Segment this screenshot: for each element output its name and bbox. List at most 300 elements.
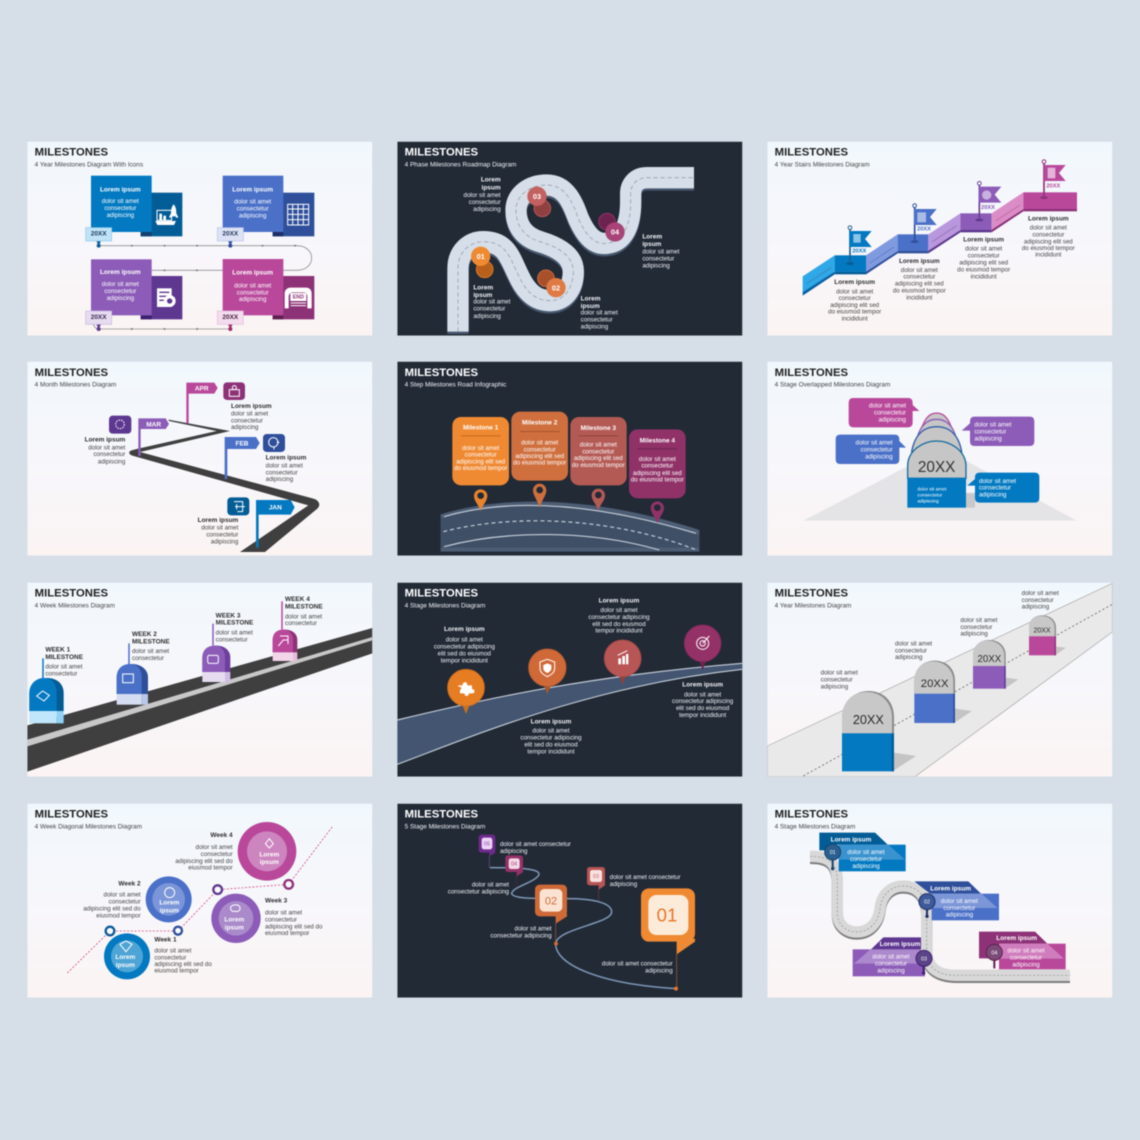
text MAR: dolor sit amet (88, 444, 126, 451)
banner 02 (914, 881, 999, 920)
text stage 1: consectetur adipiscing (434, 643, 495, 650)
text: phase 2: dolor sit amet (581, 310, 618, 317)
text stone 4: dolor sit amet (1022, 590, 1059, 597)
card 1 (86, 176, 182, 248)
stone 1 (842, 691, 916, 771)
panel: 4 stage overlapped (767, 362, 1112, 556)
text week 4: dolor sit amet (285, 613, 322, 620)
text APR: adipiscing (231, 424, 259, 431)
card 2: 20XX (222, 231, 239, 238)
title: MILESTONES (775, 588, 849, 600)
text stage 3: dolor sit amet (600, 607, 638, 614)
front block: dolor sit amet (917, 486, 947, 492)
title: MILESTONES (35, 367, 109, 379)
flag 1: 20XX (852, 248, 866, 254)
circle week 3: ipsum (225, 924, 244, 931)
flag FEB (225, 437, 260, 479)
text JAN: adipiscing (211, 539, 239, 546)
marker week 1 (29, 658, 64, 723)
card 3: consectetur (104, 288, 136, 295)
banner 01: Lorem ipsum (831, 836, 872, 843)
text: phase 1 (473, 284, 511, 320)
text: stage 1: do eiusmod tempor (828, 309, 881, 316)
flag JAN: JAN (269, 504, 282, 511)
callout purple: consectetur (974, 428, 1006, 435)
marker 02: 02 (552, 283, 560, 292)
text week 3 (216, 612, 254, 643)
marker week 2 (117, 643, 148, 705)
title: MILESTONES (775, 147, 849, 159)
icon JAN (227, 497, 249, 515)
text week 2: dolor sit amet (104, 892, 141, 899)
banner 03: adipiscing (877, 967, 905, 974)
banner 02: Lorem ipsum (930, 886, 971, 893)
marker week 4 (273, 601, 297, 661)
panel: 4 week diagonal (27, 804, 372, 998)
tag 03 (587, 867, 605, 901)
subtitle: 4 Week Diagonal Milestones Diagram (35, 823, 142, 830)
text week 2: adipiscing elit sed do (83, 906, 141, 913)
text stage 1: elit sed do eiusmod (438, 650, 492, 657)
text MAR: consectetur (93, 451, 125, 458)
text: stage 3: adipiscing elit sed (959, 259, 1009, 266)
card 2: adipiscing (239, 213, 267, 220)
title: MILESTONES (35, 809, 109, 821)
text: phase 1: ipsum (473, 292, 493, 299)
card 2: Lorem ipsum (232, 187, 273, 194)
text: stage 3: dolor sit amet (965, 246, 1003, 253)
text MAR: Lorem ipsum (85, 436, 126, 443)
text week 2: Week 2 (118, 881, 141, 888)
text APR: Lorem ipsum (231, 403, 272, 410)
panel: 4 stage road banners (767, 804, 1112, 998)
text week 1: MILESTONE (45, 654, 84, 661)
text JAN (198, 517, 239, 546)
text stone 3: dolor sit amet (960, 617, 998, 624)
marker 03 (527, 187, 551, 217)
card 3 (86, 259, 182, 331)
banner 03: dolor sit amet (872, 954, 910, 961)
text stone 1: consectetur (821, 676, 853, 683)
circle week 4: ipsum (260, 859, 279, 866)
banner 01: adipiscing (852, 863, 880, 870)
timeline path (93, 246, 312, 329)
card: milestone 2: adipiscing elit sed (515, 453, 565, 460)
subtitle: 4 Year Milestones Diagram (775, 602, 851, 609)
text week 2: consectetur (109, 899, 141, 906)
tag 02: 02 (545, 896, 557, 908)
text week 3: dolor sit amet (216, 630, 253, 637)
card: milestone 1: dolor sit amet (462, 445, 500, 452)
card 2: dolor sit amet (234, 199, 272, 206)
tag 03: 03 (593, 874, 599, 880)
text week 4: dolor sit amet (196, 844, 233, 851)
text week 4: consectetur (285, 620, 317, 627)
circle week 3: Lorem (224, 917, 244, 924)
card 4: dolor sit amet (234, 282, 272, 289)
front block: adipiscing (917, 499, 939, 505)
pin 01: 01 (830, 850, 836, 856)
banner 03: Lorem ipsum (880, 941, 921, 948)
callout sky blue: dolor sit amet (979, 478, 1016, 485)
text week 4: eiusmod tempor (188, 865, 233, 872)
circle week 4: Lorem (259, 851, 279, 858)
card 4: 20XX (222, 314, 239, 321)
title: MILESTONES (405, 367, 479, 379)
pin 4 (651, 501, 664, 523)
text stage 2: tempor incididunt (527, 748, 575, 755)
text JAN: consectetur (206, 531, 238, 538)
text FEB: dolor sit amet (266, 462, 303, 469)
flag FEB: FEB (236, 440, 249, 447)
text stage 4: elit sed do eiusmod (676, 705, 730, 712)
card: milestone 4: dolor sit amet (639, 456, 676, 463)
text: stage 2: do eiusmod tempor (893, 287, 946, 294)
card 2 (217, 176, 314, 248)
callout blue (836, 435, 906, 464)
text: phase 4 (642, 233, 680, 269)
icon APR (223, 382, 245, 400)
circle week 1: ipsum (116, 962, 135, 969)
text: phase 2: adipiscing (581, 324, 609, 331)
text week 2 (132, 631, 170, 662)
card 4: consectetur (237, 289, 269, 296)
text week 3 (265, 897, 323, 937)
text week 4: MILESTONE (285, 604, 323, 611)
zigzag road (129, 420, 319, 552)
flag 1 (846, 226, 872, 265)
text week 2: consectetur (132, 655, 164, 662)
subtitle: 4 Stage Milestones Diagram (775, 823, 855, 830)
banner 01 (819, 833, 906, 871)
card: milestone 1: adipiscing elit sed (456, 459, 506, 466)
card 1: consectetur (104, 205, 136, 212)
callout purple (962, 417, 1034, 446)
text stone 3: adipiscing (960, 631, 988, 638)
card 3: adipiscing (107, 295, 135, 302)
flag MAR (138, 418, 169, 456)
tag 01: 01 (657, 904, 677, 925)
title: MILESTONES (775, 367, 849, 379)
callout pink: consectetur (874, 409, 906, 416)
stairs (803, 192, 1077, 296)
subtitle: 4 Year Milestones Diagram With Icons (35, 161, 143, 168)
text week 3: WEEK 3 (216, 612, 241, 619)
front block (907, 478, 966, 508)
marker 03: 03 (533, 192, 541, 201)
pin 04 (986, 944, 1002, 968)
text week 3: consectetur (216, 636, 248, 643)
panel: 4 year milestone stones (767, 583, 1112, 777)
text: phase 2: consectetur (581, 317, 613, 324)
text: stage 2: consectetur (903, 274, 935, 281)
diagonal road (27, 628, 372, 772)
card: milestone 4: Milestone 4 (640, 438, 675, 445)
text APR (231, 403, 272, 431)
winding road (458, 178, 694, 334)
card 4: Lorem ipsum (232, 269, 273, 276)
callout blue: dolor sit amet (856, 439, 893, 446)
subtitle: 4 Stage Overlapped Milestones Diagram (775, 382, 890, 389)
card 4: adipiscing (239, 296, 267, 303)
text week 1: adipiscing elit sed do (154, 961, 212, 968)
flag 3 (975, 181, 1001, 221)
text stage 3 (588, 597, 650, 635)
text: stage 2: Lorem ipsum (899, 258, 940, 265)
text: stage 4: do eiusmod tempor (1022, 245, 1075, 252)
card 1: Lorem ipsum (100, 187, 141, 194)
card: milestone 2: Milestone 2 (522, 419, 558, 426)
banner 02: consectetur (943, 905, 975, 912)
text: phase 1: Lorem (473, 284, 493, 291)
perspective road (767, 583, 1112, 777)
card: milestone 1: consectetur (465, 451, 497, 458)
text week 2: MILESTONE (132, 639, 170, 646)
text: stage 4: consectetur (1032, 231, 1064, 238)
card: milestone 3: Milestone 3 (581, 425, 616, 432)
text: stage 1: adipiscing elit sed (830, 302, 880, 309)
text stone 4: adipiscing (1022, 604, 1050, 611)
year label: 20XX (918, 459, 955, 476)
text week 1: Week 1 (154, 936, 177, 943)
pin 1 (474, 489, 487, 511)
card: milestone 4: adipiscing elit sed (633, 470, 682, 477)
banner 04 (979, 932, 1066, 969)
text week 1: WEEK 1 (45, 646, 71, 653)
text 01: dolor sit amet consectetur (602, 961, 673, 968)
road band (397, 663, 742, 764)
text stage 3: elit sed do eiusmod (592, 621, 646, 628)
pin 2 (533, 484, 546, 508)
text week 3: adipiscing elit sed do (265, 923, 323, 930)
card: milestone 4: do eiusmod tempor (631, 477, 684, 484)
callout purple: dolor sit amet (974, 421, 1012, 428)
text: phase 3: adipiscing (473, 206, 501, 213)
card: milestone 4: consectetur (641, 463, 673, 470)
text MAR (85, 436, 126, 465)
text: phase 4: Lorem (642, 233, 662, 240)
stone 4: 20XX (1033, 628, 1051, 635)
flag 4: 20XX (1046, 184, 1060, 190)
text week 1: eiusmod tempor (154, 968, 199, 975)
tag 04 (505, 855, 523, 889)
banner 04: Lorem ipsum (996, 935, 1037, 942)
text stone 1: dolor sit amet (821, 669, 858, 676)
text: stage 1: dolor sit amet (836, 288, 874, 295)
circle week 1 (104, 933, 150, 979)
card: milestone 3: do eiusmod tempor (572, 462, 625, 469)
text week 2 (83, 881, 141, 919)
card: milestone 3: adipiscing elit sed (574, 455, 623, 462)
text: phase 3 (464, 177, 501, 213)
flag 4 (1040, 160, 1066, 199)
text stage 3: tempor incididunt (595, 628, 643, 635)
subtitle: 4 Step Milestones Road Infographic (405, 382, 507, 389)
text: stage 3: Lorem ipsum (963, 237, 1004, 244)
text: stage 3: incididunt (971, 273, 997, 280)
title: MILESTONES (35, 147, 109, 159)
panel: 4 week road (27, 583, 372, 777)
text week 1 (154, 936, 212, 975)
stone 4 (1029, 615, 1066, 655)
text APR: consectetur (231, 417, 263, 424)
text week 4: Week 4 (210, 832, 233, 839)
card 1: 20XX (91, 231, 107, 238)
subtitle: 4 Stage Milestones Diagram (405, 603, 485, 610)
marker 01: 01 (477, 252, 485, 261)
text stage 1: tempor incididunt (441, 657, 488, 664)
text stage 2: consectetur adipiscing (520, 735, 582, 742)
text: phase 2: ipsum (581, 303, 600, 310)
tag 04: 04 (511, 862, 517, 868)
title: MILESTONES (405, 809, 479, 821)
text: phase 1: dolor sit amet (473, 299, 511, 306)
text stone 2: adipiscing (895, 654, 923, 661)
text stage 1: dolor sit amet (446, 636, 483, 643)
text: stage 3: do eiusmod tempor (957, 266, 1010, 273)
text JAN: Lorem ipsum (198, 517, 239, 524)
text: phase 3: ipsum (482, 184, 501, 191)
subtitle: 4 Month Milestones Diagram (35, 382, 116, 389)
text: stage 2: dolor sit amet (901, 267, 938, 274)
card 1: adipiscing (107, 212, 135, 219)
text stage 3: consectetur adipiscing (588, 614, 650, 621)
text stage 4: Lorem ipsum (682, 681, 723, 688)
text: phase 3: dolor sit amet (464, 192, 501, 199)
card: milestone 2: consectetur (524, 446, 556, 453)
banner 02: dolor sit amet (941, 898, 978, 905)
banner 03: consectetur (875, 960, 907, 967)
text week 1 (45, 646, 84, 677)
title: MILESTONES (405, 588, 479, 600)
subtitle: 4 Week Milestones Diagram (35, 603, 115, 610)
circle week 2 (146, 876, 192, 922)
flag MAR: MAR (146, 421, 161, 428)
tag 01 (641, 888, 695, 991)
pin 02 (919, 894, 935, 918)
text APR: dolor sit amet (231, 410, 268, 417)
text: stage 1 (828, 279, 881, 322)
title: MILESTONES (405, 147, 479, 159)
text week 1: dolor sit amet (45, 663, 83, 670)
tag 05: 05 (484, 842, 490, 848)
title: MILESTONES (35, 588, 109, 600)
banner 01: dolor sit amet (847, 849, 885, 856)
marker 04 (599, 213, 625, 242)
card 4: END (293, 295, 304, 301)
text stage 4 (672, 681, 734, 719)
callout sky blue: adipiscing (979, 492, 1007, 499)
text week 1: consectetur (45, 670, 77, 677)
text week 3: eiusmod tempor (265, 930, 309, 937)
icon FEB (263, 434, 285, 452)
stone 3: 20XX (978, 654, 1002, 665)
text stage 4: consectetur adipiscing (672, 698, 734, 705)
text: stage 3 (957, 237, 1010, 280)
callout purple: adipiscing (974, 435, 1002, 442)
banner 02: adipiscing (946, 912, 974, 919)
text 05: dolor sit amet consectetur (500, 841, 571, 848)
text week 2: eiusmod tempor (96, 912, 141, 919)
text 03: adipiscing (610, 881, 638, 888)
text: phase 1: consectetur (473, 306, 505, 313)
stone 2 (914, 661, 972, 723)
card 1: dolor sit amet (102, 198, 139, 205)
marker 02 (538, 270, 566, 297)
text week 3: MILESTONE (216, 620, 254, 627)
pin 03: 03 (921, 956, 927, 962)
flag APR: APR (195, 385, 209, 392)
panel: 4 month zigzag road (27, 362, 372, 556)
text: stage 4: dolor sit amet (1030, 225, 1067, 232)
curved road (441, 502, 699, 552)
text stage 2: elit sed do eiusmod (524, 742, 578, 749)
text stone 1: adipiscing (821, 683, 849, 690)
text week 2: dolor sit amet (132, 648, 169, 655)
flag 2 (911, 204, 937, 243)
panel: 4 phase roadmap (397, 142, 742, 336)
text: phase 4: adipiscing (642, 262, 670, 269)
pin 1 puzzle (448, 669, 484, 714)
callout pink (849, 398, 919, 427)
text FEB (266, 455, 307, 483)
road (810, 856, 1070, 977)
text stage 2: Lorem ipsum (531, 719, 572, 726)
text 02: dolor sit amet (515, 926, 552, 933)
text 03: dolor sit amet consectetur (610, 874, 681, 881)
callout blue: consectetur (861, 446, 893, 453)
text: phase 4: consectetur (642, 255, 674, 262)
text week 4 (285, 596, 323, 627)
text JAN: dolor sit amet (201, 525, 239, 532)
pin 03 (916, 950, 932, 975)
callout pink: adipiscing (878, 417, 907, 424)
card 3: 20XX (91, 314, 107, 321)
card: milestone 2: dolor sit amet (521, 439, 559, 446)
stone 1: 20XX (853, 713, 884, 727)
text: stage 1: consectetur (839, 295, 871, 302)
card: milestone 3: dolor sit amet (580, 441, 617, 448)
text 01: adipiscing (645, 968, 673, 975)
text week 4: consectetur (201, 851, 233, 858)
circle week 4 (238, 822, 296, 881)
pin 04: 04 (991, 950, 997, 956)
overlapping arches (908, 413, 975, 508)
text: stage 2: incididunt (906, 294, 933, 301)
text: phase 4: ipsum (642, 241, 662, 248)
text stage 1: Lorem ipsum (444, 626, 485, 633)
text 04: dolor sit amet (472, 882, 509, 889)
text MAR: adipiscing (98, 458, 126, 465)
text: phase 3: Lorem (481, 177, 501, 184)
callout sky blue: consectetur (979, 485, 1011, 492)
flag 3: 20XX (981, 205, 995, 211)
flag 2: 20XX (917, 226, 931, 232)
pin 4 target (684, 625, 721, 670)
pin 2 shield (529, 649, 566, 694)
text: stage 2 (893, 258, 946, 301)
circle week 1: Lorem (115, 954, 135, 961)
tag 05 (479, 835, 495, 868)
stone 3 (973, 640, 1018, 689)
text stone 4: consectetur (1022, 597, 1054, 604)
card 2: consectetur (237, 206, 269, 213)
flag JAN (256, 500, 295, 548)
text: stage 2: adipiscing elit sed (895, 281, 944, 288)
winding line (490, 868, 676, 989)
marker 04: 04 (611, 228, 620, 237)
text stone 2: dolor sit amet (895, 640, 932, 647)
